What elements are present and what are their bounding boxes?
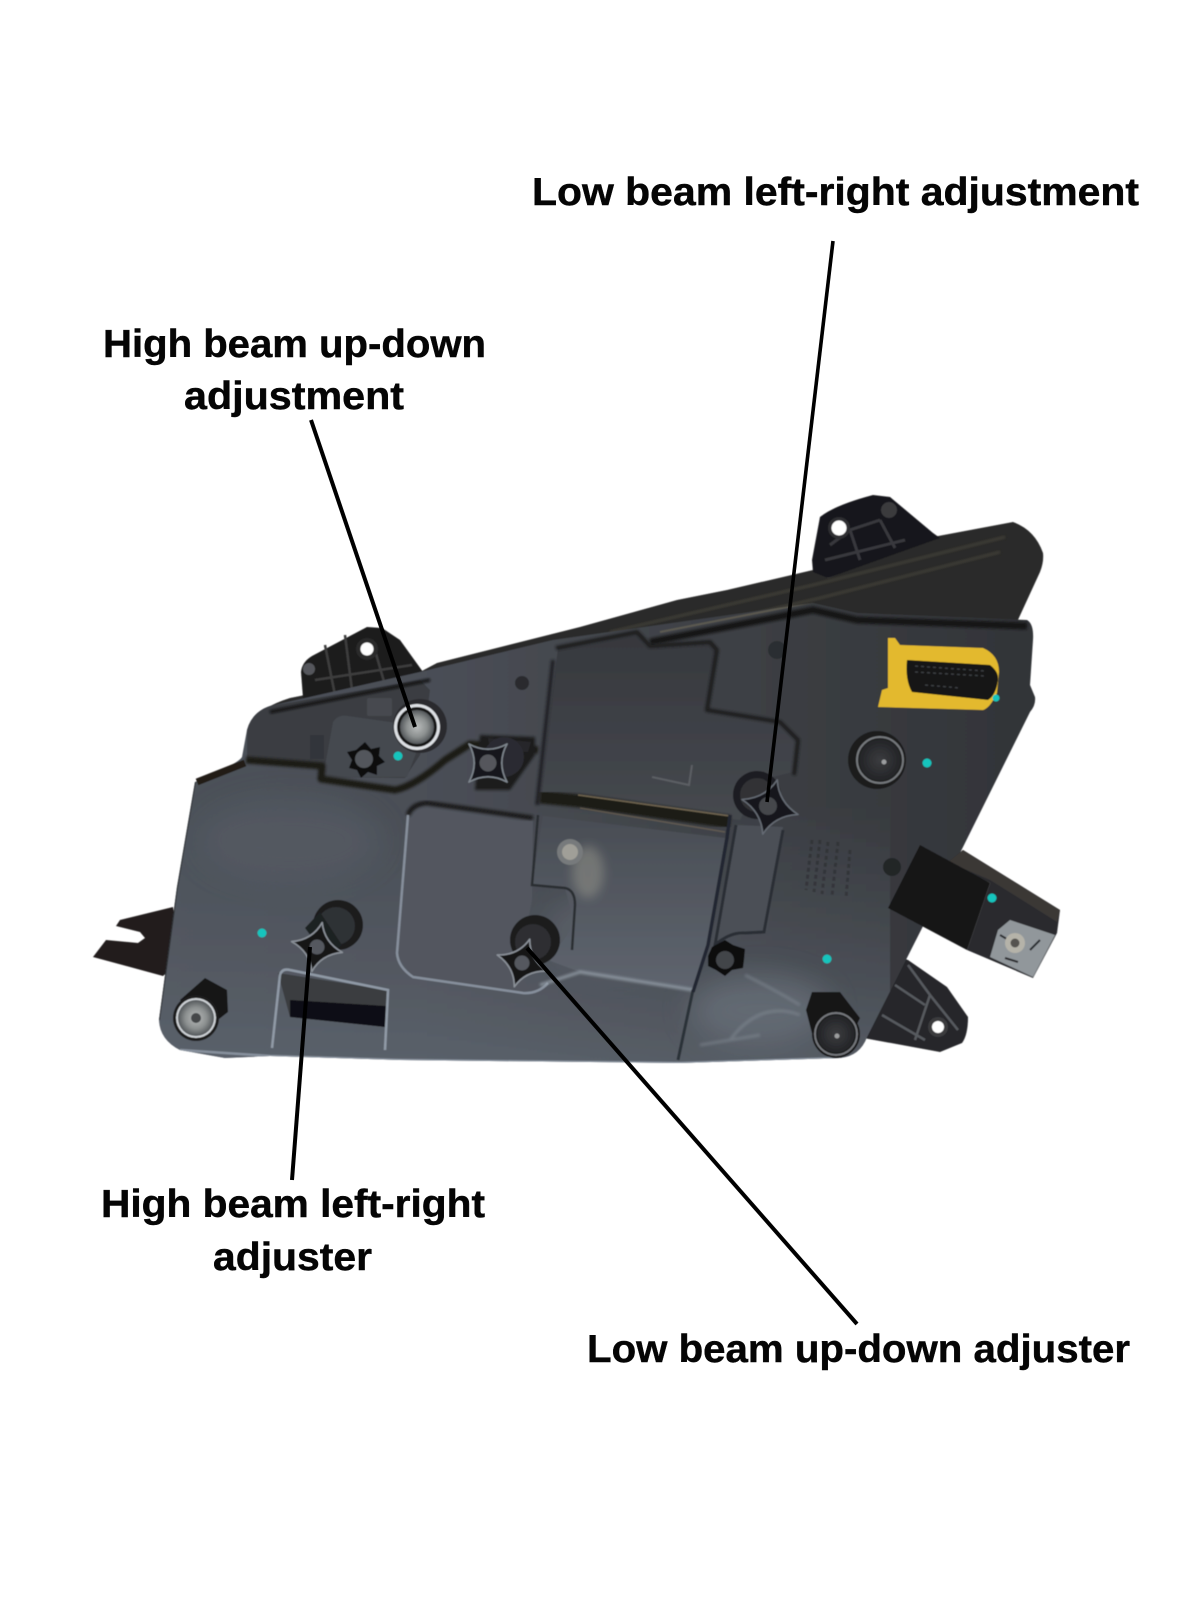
narrow strip — [712, 825, 783, 944]
bottom edge highlight — [180, 1050, 840, 1063]
yellow wiring connector — [878, 638, 999, 710]
arrow: high beam up-down — [311, 420, 415, 727]
label: high beam left-right adjuster: adjuster — [213, 1236, 372, 1279]
label: high beam up-down adjustment: High beam up-down — [103, 323, 486, 366]
centre raised panels — [397, 632, 850, 1060]
moulded text block — [806, 840, 850, 898]
upper centre panel — [540, 633, 797, 820]
plate surface shading — [150, 602, 1027, 1070]
right mounting tab — [888, 845, 1060, 978]
arrow: low beam up-down — [527, 948, 857, 1324]
label: low beam left-right adjustment: Low beam left-right adjustment — [532, 171, 1139, 214]
top edge band — [650, 610, 1027, 642]
right lower panel — [532, 816, 725, 990]
round cap: lower right — [806, 992, 860, 1058]
locating tabs — [367, 698, 392, 716]
rectangular slot — [272, 970, 388, 1050]
round cap: upper right — [848, 731, 906, 789]
locating pins — [515, 641, 901, 876]
star knob: centre left — [450, 725, 535, 801]
upper left bracket — [301, 627, 425, 702]
arrow: high beam left-right — [292, 947, 310, 1180]
upper right bracket — [812, 495, 940, 578]
label: high beam left-right adjuster — [101, 1183, 485, 1279]
upper left recessed panel — [197, 680, 538, 790]
arrow: low beam left-right — [767, 241, 833, 802]
channel between panels — [540, 797, 730, 822]
label: high beam up-down adjustment — [103, 323, 486, 418]
label: high beam left-right adjuster: High beam left-right — [101, 1183, 485, 1226]
label: high beam up-down adjustment: adjustment — [184, 375, 404, 418]
star knob: low beam up-down — [490, 915, 560, 995]
left lower panel — [397, 803, 533, 993]
star knob: high beam left-right — [286, 900, 363, 977]
headlight adjustment diagram — [92, 176, 1139, 1370]
gear pins — [347, 742, 745, 976]
headlight photo — [93, 495, 1060, 1070]
left slotted tab — [93, 907, 182, 976]
label: low beam up-down adjuster: Low beam up-down adjuster — [587, 1328, 1130, 1371]
front plate — [159, 603, 1035, 1063]
teal marker dots — [258, 694, 1000, 964]
rear housing — [250, 522, 1043, 760]
lower right bracket — [858, 955, 968, 1052]
metal clip — [990, 920, 1055, 977]
high beam up-down screw — [393, 699, 447, 753]
moulded mark — [652, 765, 692, 785]
housing top highlight — [610, 537, 1005, 640]
corner screw — [173, 978, 228, 1041]
star knob: low beam left-right — [733, 771, 805, 842]
